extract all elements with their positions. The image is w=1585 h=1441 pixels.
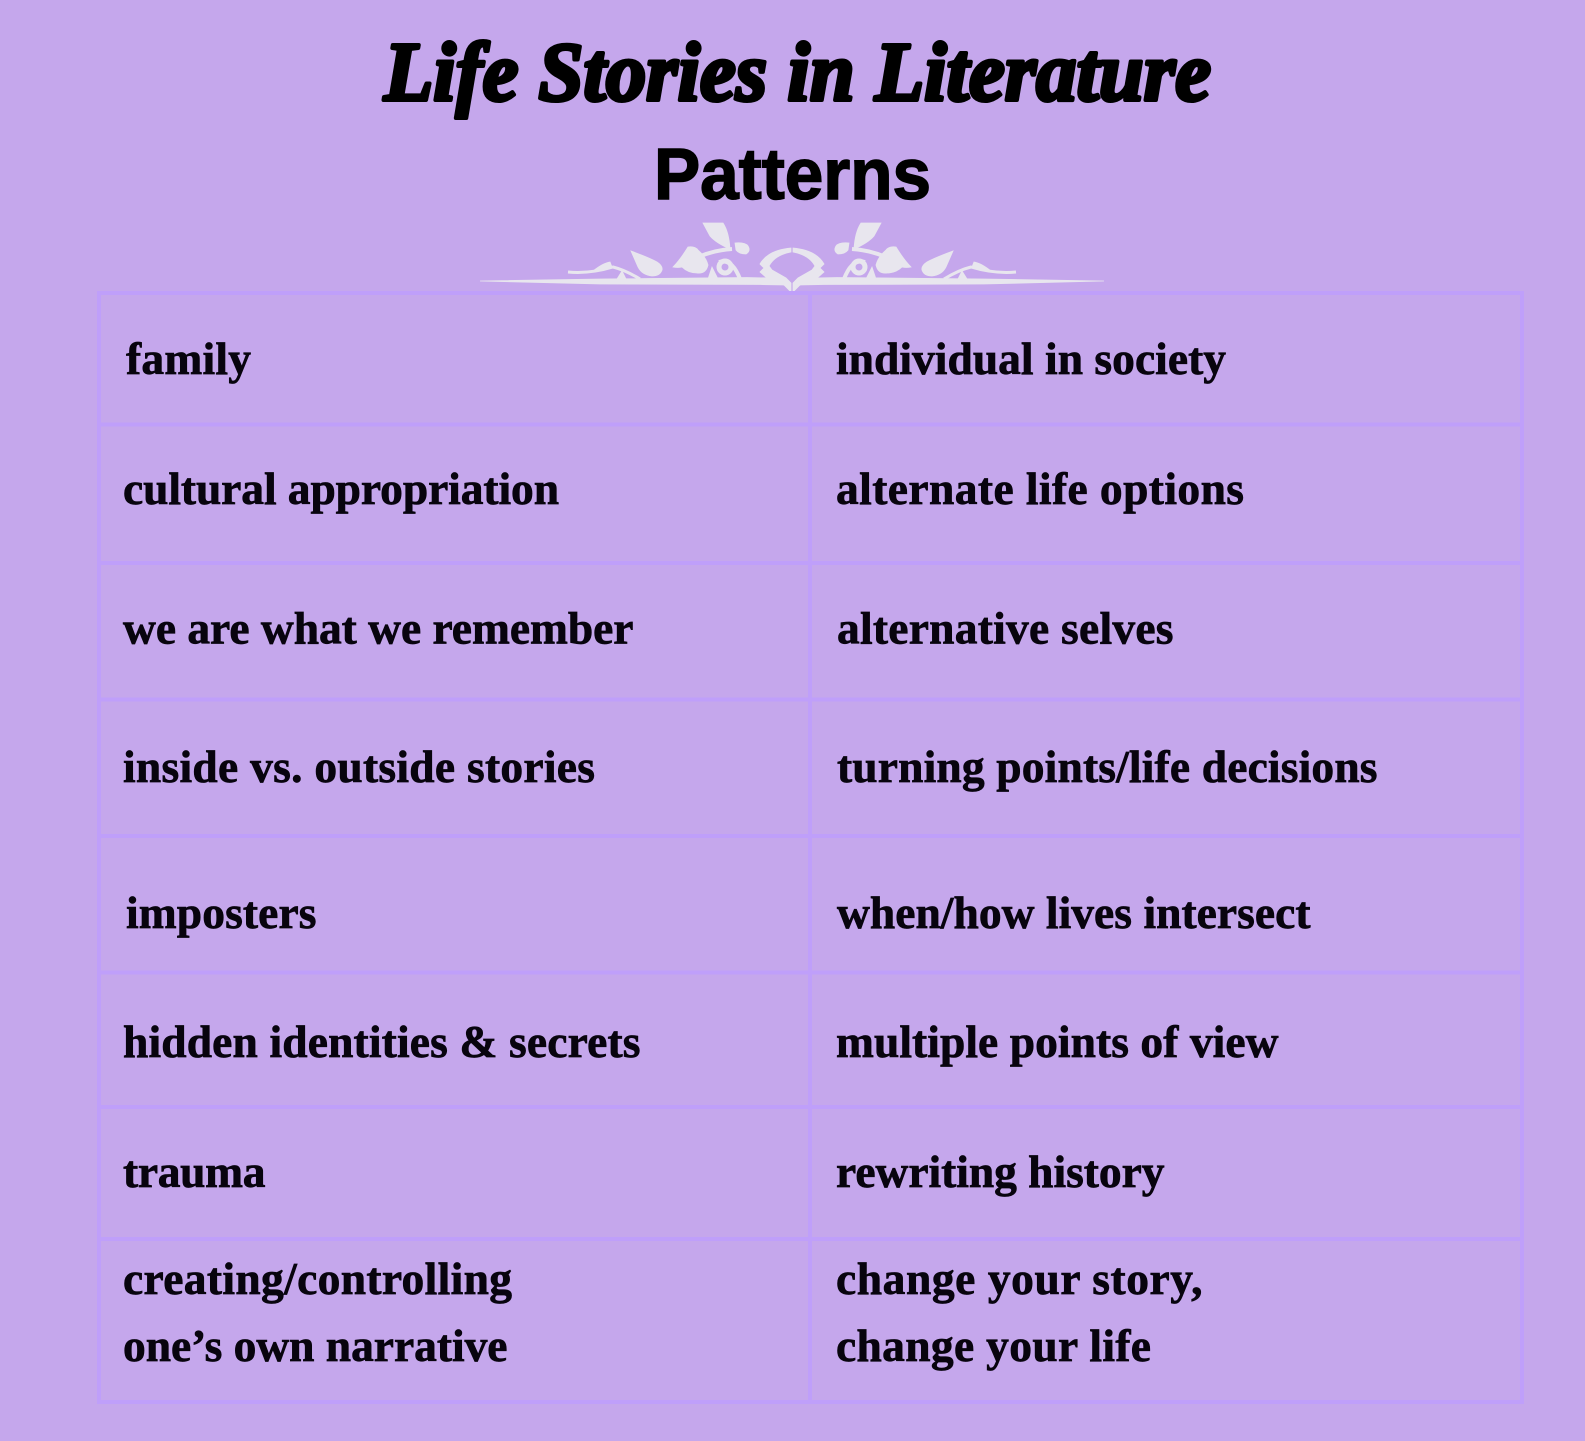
right column patterns: when/how lives intersect: [837, 887, 1310, 938]
right column patterns: individual in society: [836, 333, 1226, 384]
left column patterns: hidden identities & secrets: [123, 1016, 640, 1067]
table grid: [99, 293, 1522, 1402]
right column patterns: [836, 333, 1378, 1371]
left column patterns: cultural appropriation: [123, 463, 559, 514]
title: Life Stories in Literature: [383, 26, 1211, 119]
right column patterns: alternate life options: [836, 463, 1244, 514]
ornament: floral divider: [480, 223, 1104, 292]
left column patterns: creating/controlling: [123, 1253, 512, 1304]
right column patterns: turning points/life decisions: [837, 741, 1378, 792]
subtitle: Patterns: [654, 135, 931, 215]
left column patterns: trauma: [123, 1146, 266, 1197]
left column patterns: we are what we remember: [123, 602, 634, 654]
right column patterns: multiple points of view: [836, 1016, 1279, 1067]
right column patterns: alternative selves: [837, 602, 1174, 654]
left column patterns: family: [126, 333, 251, 384]
left column patterns: imposters: [126, 887, 316, 938]
right column patterns: change your life: [836, 1320, 1151, 1371]
left column patterns: [123, 333, 640, 1371]
left column patterns: inside vs. outside stories: [123, 741, 595, 792]
right column patterns: rewriting history: [836, 1146, 1165, 1197]
right column patterns: change your story,: [836, 1253, 1202, 1304]
left column patterns: one’s own narrative: [123, 1320, 508, 1371]
